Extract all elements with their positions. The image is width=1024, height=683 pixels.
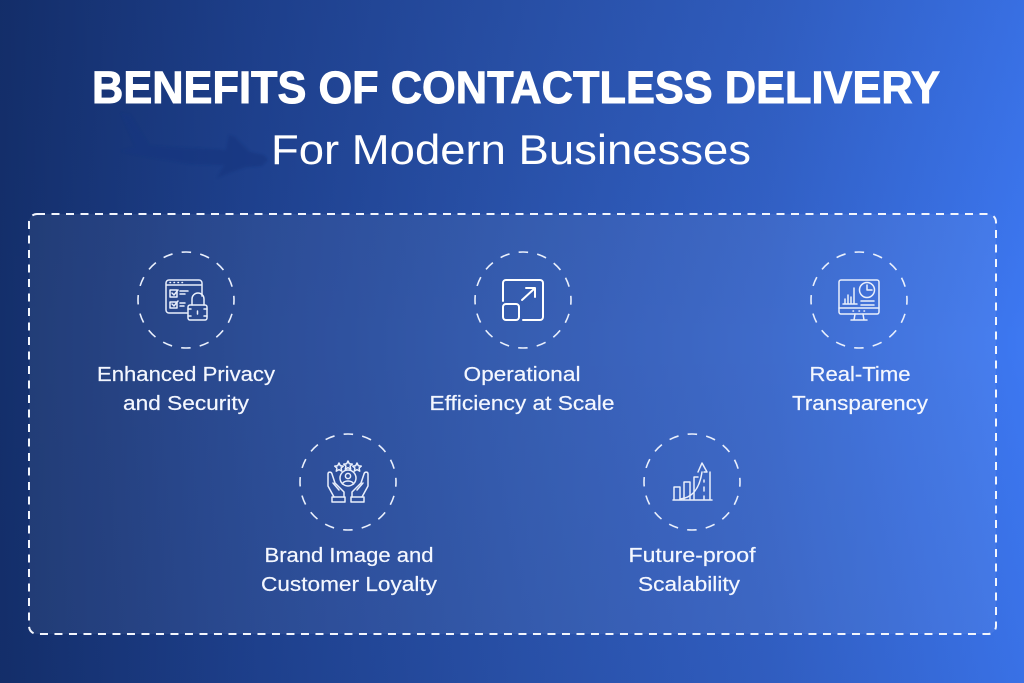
icon: checklist with padlock bbox=[138, 252, 234, 348]
label: Brand Image and bbox=[264, 545, 434, 567]
label line 2: Customer Loyalty bbox=[261, 574, 437, 596]
label line 2: Scalability bbox=[638, 574, 740, 596]
subtitle: For Modern Businesses bbox=[271, 126, 751, 173]
benefit: Real-Time Transparency bbox=[792, 252, 928, 415]
title: BENEFITS OF CONTACTLESS DELIVERY bbox=[92, 62, 940, 113]
benefit: Enhanced Privacy and Security bbox=[97, 252, 275, 415]
label: Future-proof bbox=[628, 545, 756, 567]
benefit: Future-proof Scalability bbox=[628, 434, 756, 596]
benefit: Brand Image and Customer Loyalty bbox=[261, 434, 437, 596]
label line 2: Efficiency at Scale bbox=[430, 393, 614, 415]
label: Real-Time bbox=[810, 364, 910, 386]
label line 2: Transparency bbox=[792, 393, 928, 415]
benefit: Operational Efficiency at Scale bbox=[430, 252, 614, 415]
label line 2: and Security bbox=[123, 393, 249, 415]
icon: monitor with charts bbox=[811, 252, 907, 348]
label: Enhanced Privacy bbox=[97, 364, 275, 386]
icon: growth bars with arrow bbox=[644, 434, 740, 530]
icon: resize square with arrow bbox=[475, 252, 571, 348]
panel: benefits bbox=[29, 214, 996, 634]
label: Operational bbox=[464, 364, 580, 386]
icon: hands holding person and stars bbox=[300, 434, 396, 530]
faint airplane silhouette bbox=[121, 113, 268, 178]
